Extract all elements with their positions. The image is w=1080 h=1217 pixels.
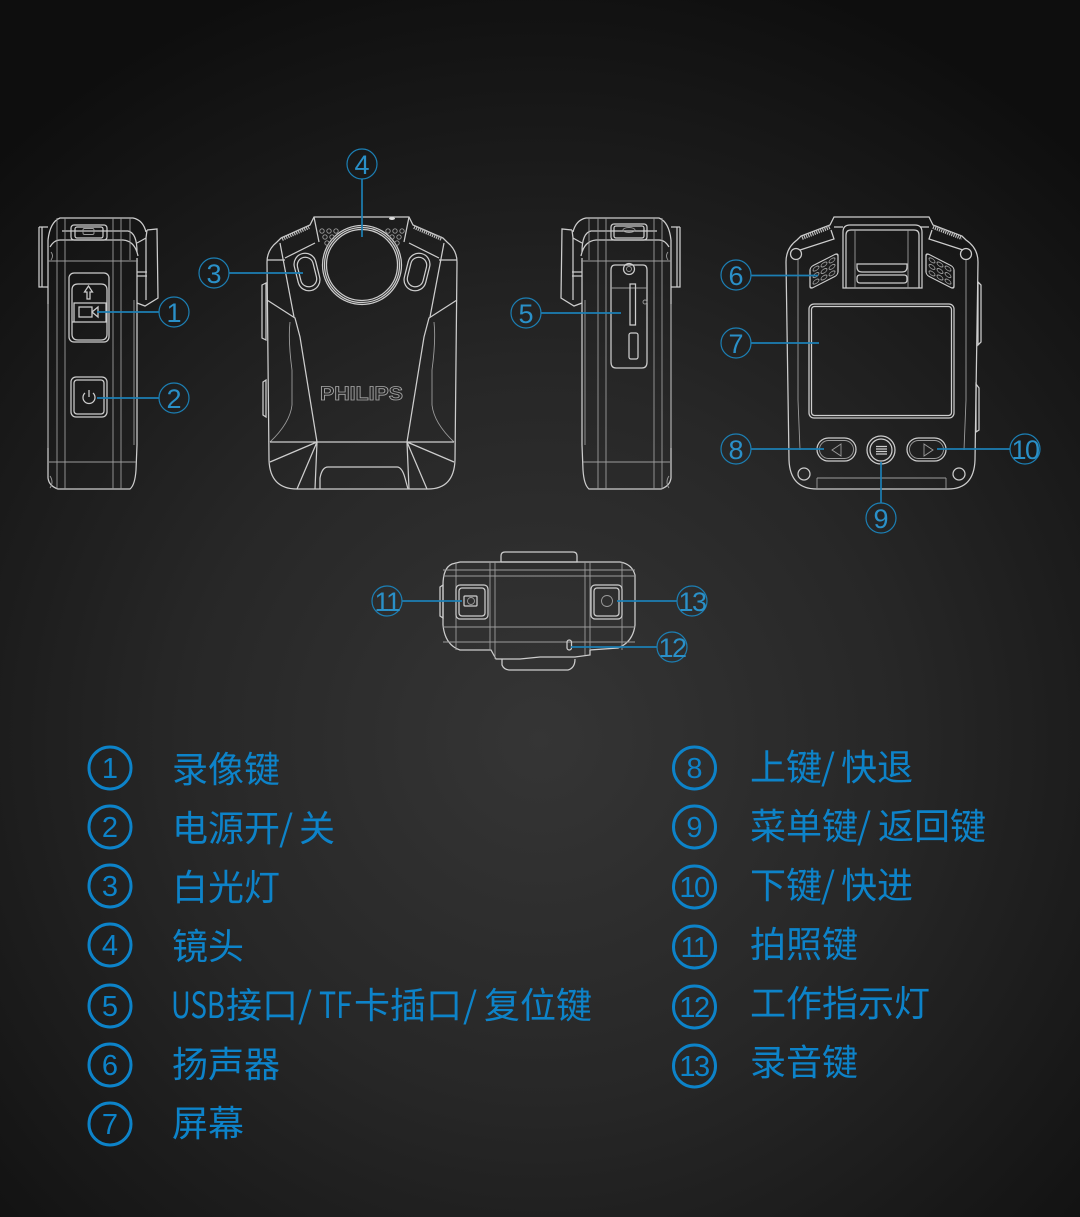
callout 6: [721, 260, 818, 291]
legend item 12: 工作指示灯: [750, 975, 930, 1027]
callout 12: [571, 632, 687, 663]
callout 1: 1: [166, 298, 182, 328]
legend item 7: [89, 1095, 244, 1147]
legend item 13: 13: [679, 1051, 709, 1083]
callout 5: [511, 298, 621, 329]
legend item 5: 卡插口: [354, 977, 462, 1029]
device: bottom view: [440, 552, 635, 670]
device: right side view: [561, 218, 680, 489]
callout 5: 5: [518, 299, 534, 329]
callout 13: [617, 586, 707, 617]
callout 8: 8: [728, 435, 744, 465]
legend item 9: 菜单键: [750, 798, 858, 850]
legend item 7: 屏幕: [172, 1095, 244, 1147]
legend item 1: 录像键: [172, 741, 280, 793]
legend item 8: [674, 739, 913, 791]
legend item 3: 3: [102, 871, 118, 903]
legend item 4: [89, 918, 244, 970]
photo button: [456, 585, 488, 619]
callout 6: 6: [728, 261, 744, 291]
callout 8: [721, 434, 824, 465]
screen: [809, 304, 954, 418]
PHILIPS logo: PHILIPS: [320, 384, 403, 405]
legend item 9: [674, 798, 986, 850]
callout 3: [199, 258, 303, 289]
legend item 6: [89, 1036, 280, 1088]
legend item 4: 4: [102, 930, 118, 962]
legend right column: [674, 739, 986, 1087]
menu button: [867, 436, 895, 464]
legend item 1: 1: [102, 753, 118, 785]
legend item 2: [89, 800, 335, 852]
record slider switch: [69, 273, 109, 342]
legend item 2: 关: [299, 800, 335, 852]
legend item 8: 快退: [841, 739, 913, 791]
legend item 5: 接口: [226, 977, 298, 1029]
callout 9: 9: [873, 504, 889, 534]
legend item 11: [674, 916, 858, 968]
clip housing: [843, 225, 922, 288]
icon: power button: [71, 377, 107, 417]
legend item 5: 5: [102, 991, 118, 1023]
indicator light: [567, 640, 572, 650]
legend item 11: 11: [680, 932, 708, 964]
legend item 4: 镜头: [172, 918, 244, 970]
device: left side view: [39, 218, 158, 489]
microphone dots: [320, 229, 404, 245]
legend item 13: [674, 1034, 858, 1087]
legend item 5: TF: [319, 977, 352, 1029]
legend item 2: /: [279, 800, 293, 852]
callout 9: [866, 462, 896, 534]
callout 2: 2: [166, 384, 182, 414]
legend item 5: /: [463, 977, 477, 1029]
legend item 8: /: [821, 739, 835, 791]
lens: [322, 226, 402, 304]
legend item 12: [674, 975, 930, 1028]
callout 3: 3: [206, 259, 222, 289]
legend item 3: 白光灯: [172, 859, 280, 911]
legend item 6: 扬声器: [172, 1036, 280, 1088]
legend item 1: [89, 741, 280, 793]
legend item 6: 6: [102, 1050, 118, 1082]
legend item 10: 快进: [841, 857, 913, 909]
legend item 10: [674, 857, 913, 909]
callout 7: [721, 328, 819, 359]
corner screws: [790, 248, 972, 480]
legend item 13: 录音键: [750, 1034, 858, 1086]
callout 11: [372, 586, 462, 617]
right button: [907, 438, 946, 461]
callout 7: 7: [728, 329, 744, 359]
callout 10: [937, 434, 1040, 465]
device: front view: [262, 217, 457, 489]
legend item 3: [89, 859, 280, 911]
legend item 7: 7: [102, 1109, 118, 1141]
speaker right: [926, 253, 954, 289]
legend item 11: 拍照键: [750, 916, 858, 968]
legend item 9: 返回键: [878, 798, 986, 850]
legend item 5: 复位键: [484, 977, 592, 1029]
callout 13: 13: [678, 587, 706, 617]
legend left column: [89, 741, 592, 1147]
legend item 5: /: [298, 977, 312, 1029]
legend item 10: /: [821, 857, 835, 909]
legend item 8: 上键: [750, 739, 822, 791]
port door: [611, 264, 647, 368]
legend item 5: [89, 977, 592, 1029]
legend item 10: 下键: [750, 857, 822, 909]
legend item 9: /: [857, 798, 871, 850]
icon: top button: [71, 225, 107, 240]
callout 2: [97, 383, 189, 414]
legend item 2: 电源开: [172, 800, 280, 852]
callout 4: 4: [354, 150, 370, 180]
legend item 8: 8: [686, 753, 703, 785]
top button: [611, 224, 647, 240]
legend item 2: 2: [102, 812, 118, 844]
audio button: [591, 585, 622, 619]
legend item 5: USB: [171, 977, 225, 1029]
device: back view: [786, 217, 981, 489]
callout 11: 11: [374, 587, 400, 617]
callout 4: [347, 149, 377, 237]
left button: [817, 438, 856, 461]
legend item 10: 10: [679, 872, 709, 904]
callout 1: [97, 297, 189, 328]
legend item 12: 12: [679, 992, 709, 1024]
callout 10: 10: [1011, 435, 1039, 465]
white light left: [292, 251, 322, 293]
legend item 9: 9: [686, 812, 703, 844]
callout 12: 12: [658, 633, 686, 663]
speaker left: [810, 253, 838, 289]
white light right: [402, 251, 432, 293]
